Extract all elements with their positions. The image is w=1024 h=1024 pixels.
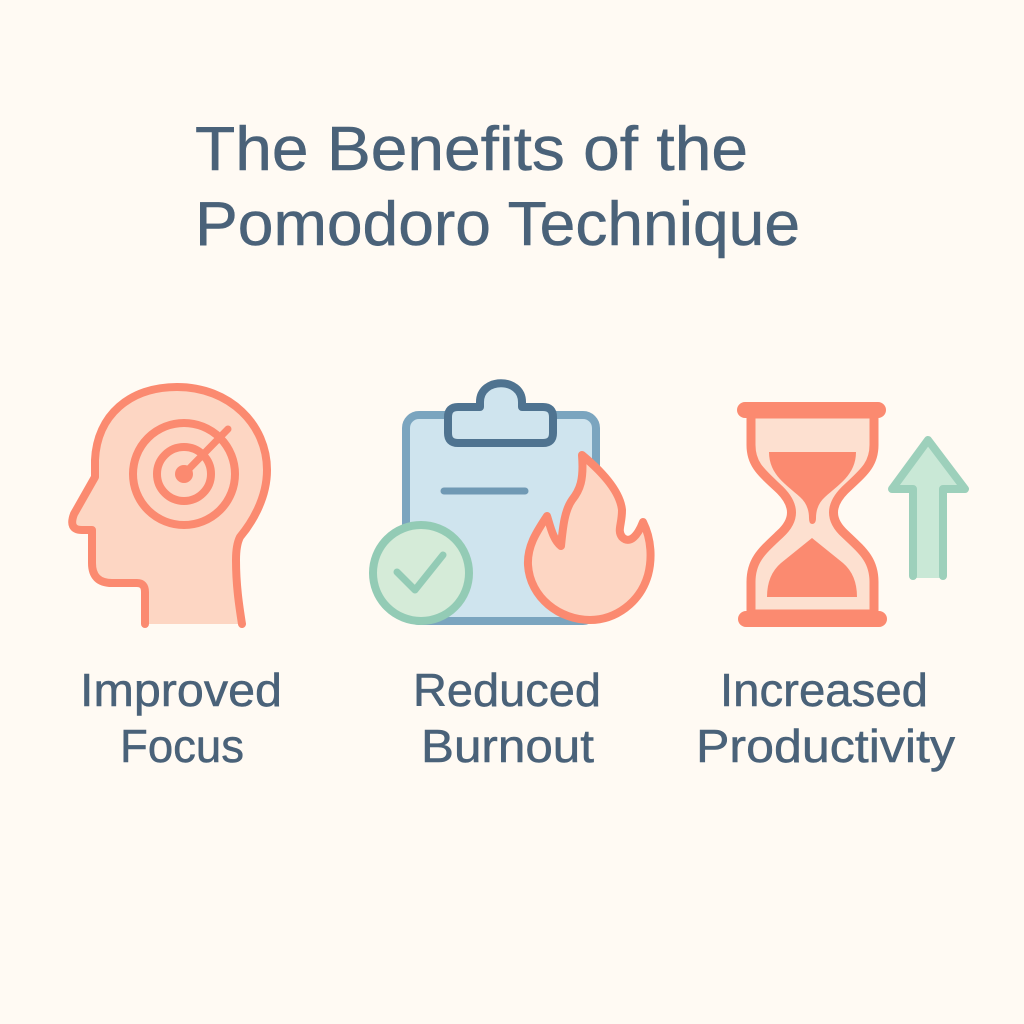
label: reduced burnout: [413, 664, 601, 772]
bottom sand: [767, 538, 857, 597]
check badge: [373, 525, 469, 621]
target needle: [184, 429, 228, 474]
title: Pomodoro Technique: [195, 190, 800, 259]
clipboard clip: [448, 383, 553, 443]
title: [195, 115, 800, 259]
label: improved focus: [80, 664, 282, 772]
bottom bar: [738, 611, 887, 627]
label: reduced burnout: Burnout: [421, 720, 594, 772]
target inner ring: [157, 447, 211, 501]
label: increased productivity: [696, 664, 955, 772]
label: increased productivity: Increased: [720, 664, 928, 716]
icon: clipboard with check and flame: [373, 383, 651, 621]
target center dot: [175, 465, 193, 483]
icon: hourglass: [737, 402, 887, 627]
icon: up arrow: [892, 440, 965, 578]
title: The Benefits of the: [195, 115, 748, 184]
hourglass glass: [751, 414, 874, 614]
clipboard text line: [444, 488, 525, 494]
clipboard board: [406, 415, 596, 621]
icon: head with target: [72, 387, 267, 624]
label: increased productivity: Productivity: [696, 720, 955, 772]
top bar: [737, 402, 886, 418]
label: reduced burnout: Reduced: [413, 664, 601, 716]
top sand: [769, 452, 856, 524]
label: improved focus: Focus: [120, 720, 244, 772]
flame: [528, 455, 651, 620]
label: improved focus: Improved: [80, 664, 282, 716]
target outer ring: [133, 423, 235, 525]
